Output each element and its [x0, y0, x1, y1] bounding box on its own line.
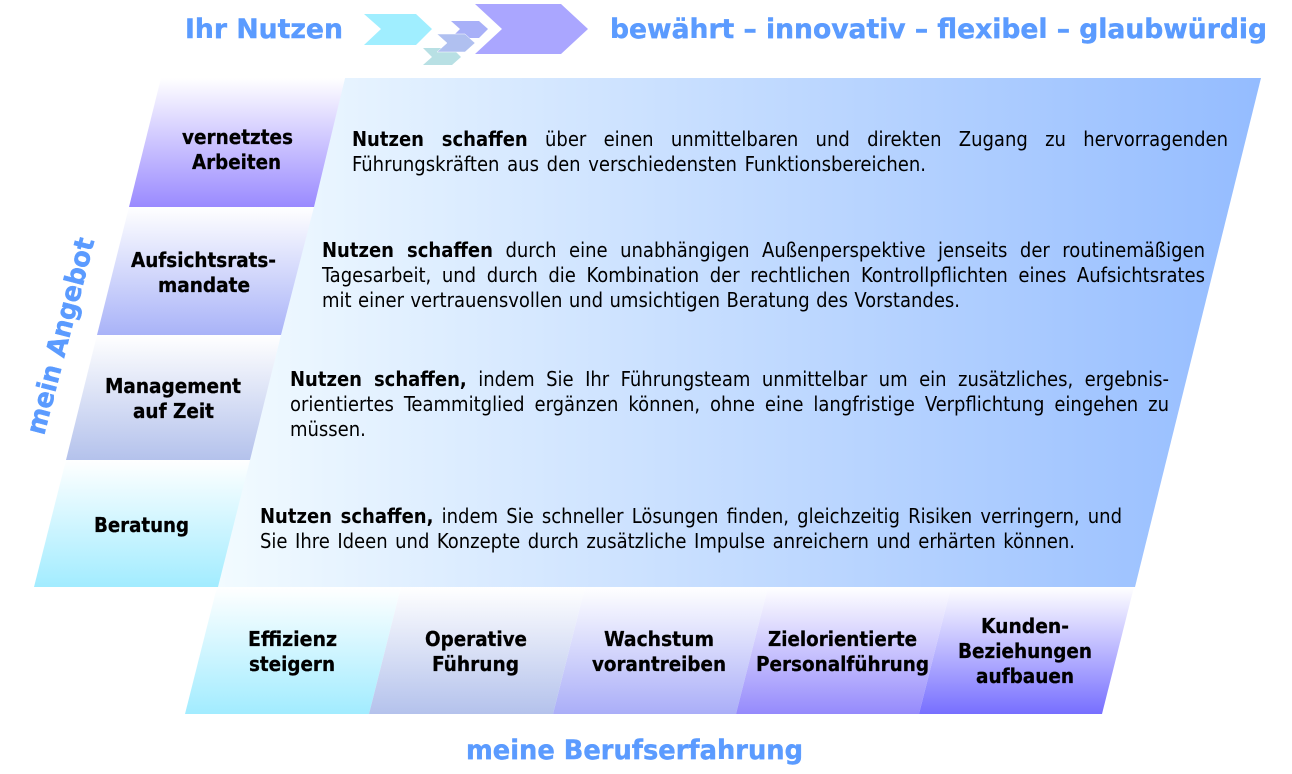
- text block: Aufsichtsratsmandate benefit: mit einer vertrauensvollen und umsichtigen Beratung des Vorstandes.: [322, 288, 960, 312]
- offer: Management auf Zeit: Management: [105, 374, 241, 398]
- experience: Effizienz steigern: steigern: [249, 652, 335, 676]
- experience: Zielorientierte Personalführung: Personalführung: [756, 652, 929, 676]
- text block: vernetztes Arbeiten benefit: Führungskräften aus den verschiedensten Funktionsbereichen.: [352, 152, 926, 176]
- experience: Effizienz steigern: [185, 587, 401, 714]
- offer: Beratung: [34, 460, 250, 587]
- experience: Operative Führung: Führung: [432, 652, 519, 676]
- axis label: mein Angebot: mein Angebot: [21, 234, 101, 438]
- experience: Wachstum vorantreiben: [553, 587, 768, 714]
- header: Ihr Nutzen: Ihr Nutzen: [185, 14, 343, 45]
- offer: Aufsichtsratsmandate: [97, 207, 314, 335]
- header: values tagline: bewährt – innovativ – flexibel – glaubwürdig: [610, 14, 1267, 45]
- experience: Effizienz steigern: Effizienz: [248, 627, 337, 651]
- experience: Operative Führung: [369, 587, 585, 714]
- experience: Kunden-Beziehungen aufbauen: aufbauen: [976, 664, 1074, 688]
- experience: Kunden-Beziehungen aufbauen: [919, 587, 1134, 714]
- offer: Management auf Zeit: auf Zeit: [133, 399, 214, 423]
- text block: Beratung benefit: [260, 504, 1122, 553]
- text block: Aufsichtsratsmandate benefit: [322, 238, 1205, 312]
- panel: offer column: [34, 78, 345, 587]
- text block: vernetztes Arbeiten benefit: [352, 127, 1228, 176]
- offer: vernetztes Arbeiten: vernetztes: [182, 125, 293, 149]
- experience: Operative Führung: Operative: [425, 627, 527, 651]
- experience: Kunden-Beziehungen aufbauen: Beziehungen: [958, 639, 1092, 663]
- text block: Management auf Zeit benefit: müssen.: [290, 417, 366, 441]
- text block: Aufsichtsratsmandate benefit: Nutzen schaffen durch eine unabhängigen Außenperspektive jenseits der routinemäßigen: [322, 238, 1205, 262]
- icon: chevron arrows: [364, 4, 588, 65]
- offer: Beratung: Beratung: [94, 513, 189, 537]
- experience: Zielorientierte Personalführung: Zielorientierte: [768, 627, 917, 651]
- experience: Kunden-Beziehungen aufbauen: Kunden-: [981, 614, 1069, 638]
- text block: Management auf Zeit benefit: Nutzen schaffen, indem Sie Ihr Führungsteam unmittelbar um ein zusätzliches, ergebnis-: [290, 367, 1169, 391]
- offer: Management auf Zeit: [66, 335, 281, 460]
- offer: vernetztes Arbeiten: Arbeiten: [192, 150, 281, 174]
- text block: Management auf Zeit benefit: [290, 367, 1169, 441]
- text block: vernetztes Arbeiten benefit: Nutzen schaffen über einen unmittelbaren und direkten Zugang zu hervorragenden: [352, 127, 1228, 151]
- offer: Aufsichtsratsmandate: Aufsichtsrats-: [131, 248, 276, 272]
- text block: Beratung benefit: Sie Ihre Ideen und Konzepte durch zusätzliche Impulse anreichern und erhärten können.: [260, 529, 1075, 553]
- experience: Wachstum vorantreiben: Wachstum: [604, 627, 714, 651]
- text block: Management auf Zeit benefit: orientiertes Teammitglied ergänzen können, ohne eine langfristige Verpflichtung eingehen zu: [290, 392, 1169, 416]
- text block: Beratung benefit: Nutzen schaffen, indem Sie schneller Lösungen finden, gleichzeitig Risiken verringern, und: [260, 504, 1122, 528]
- axis label: meine Berufserfahrung: meine Berufserfahrung: [466, 735, 803, 766]
- text block: Aufsichtsratsmandate benefit: Tagesarbeit, und durch die Kombination der rechtlichen Kontrollpflichten eines Aufsichtsrates: [322, 263, 1205, 287]
- offer: vernetztes Arbeiten: [129, 78, 345, 207]
- experience: Wachstum vorantreiben: vorantreiben: [592, 652, 726, 676]
- panel: benefits background: [218, 78, 1261, 587]
- offer: Aufsichtsratsmandate: mandate: [158, 273, 250, 297]
- experience: Zielorientierte Personalführung: [736, 587, 951, 714]
- panel: experience row: [185, 587, 1134, 714]
